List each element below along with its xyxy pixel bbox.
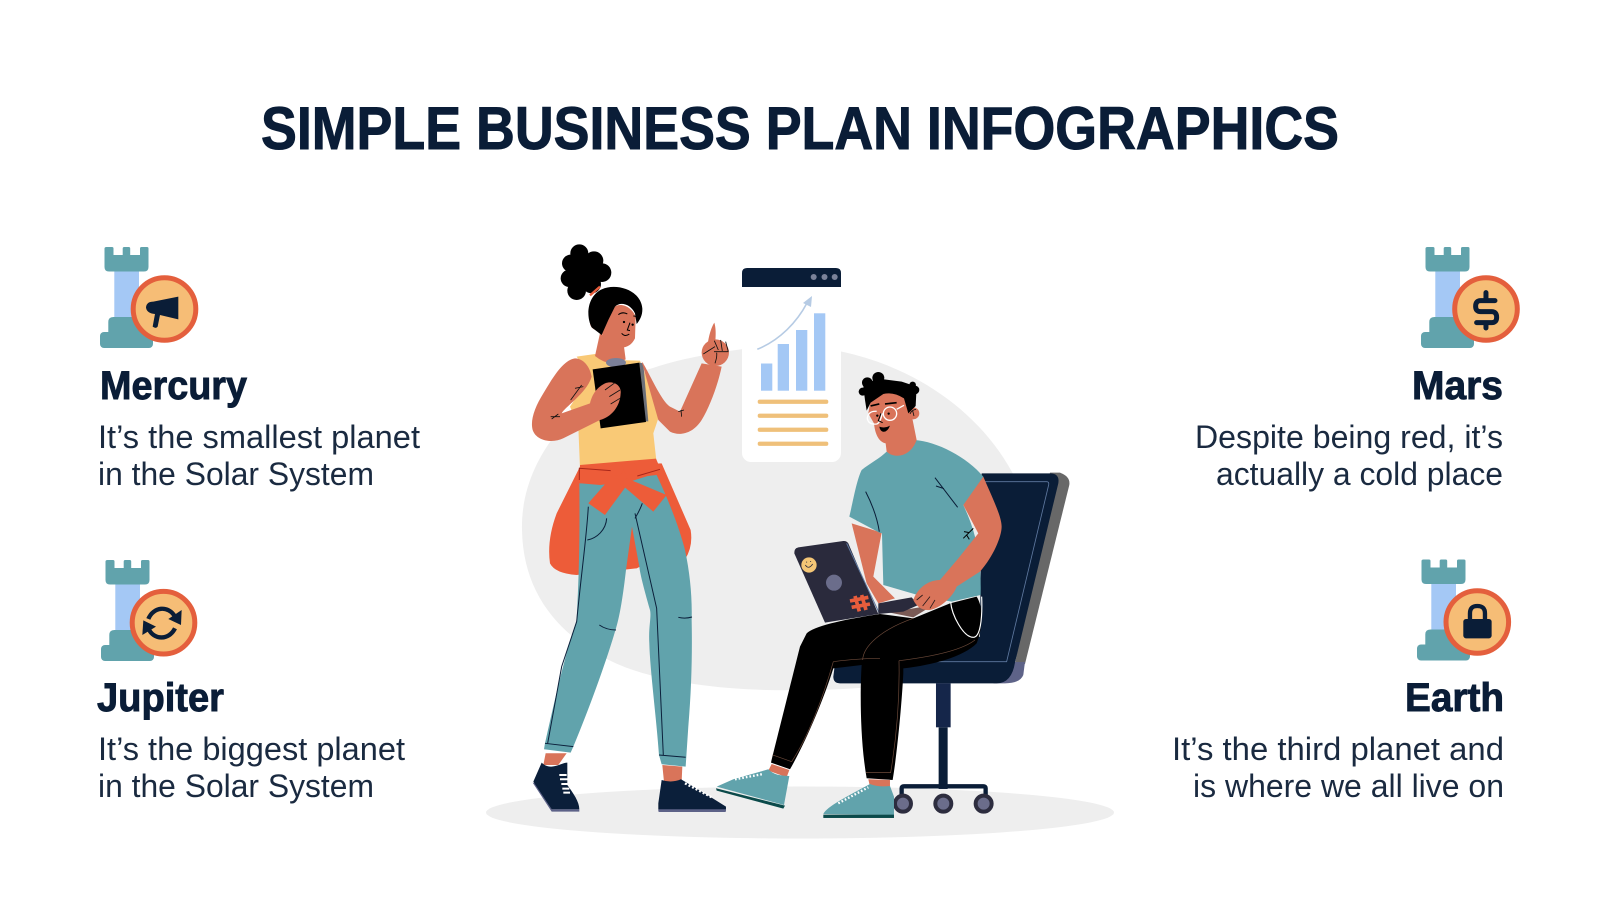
panel: Mars [1195,247,1517,492]
heading: Mars: Mars [1412,364,1503,408]
text block: Earth description: It’s the third planet and [1172,731,1504,767]
man: laptop [794,541,933,623]
woman: pants [544,475,692,767]
text block: Jupiter description: in the Solar System [98,768,374,804]
heading: Jupiter: Jupiter [97,676,224,720]
woman: orange shirt tied at waist (hanging back) [549,463,691,575]
heading: Mercury: Mercury [100,364,248,408]
woman: hair bun [561,244,611,300]
man: head [859,372,919,456]
text block: Earth description: is where we all live on [1193,768,1504,804]
panel: Mercury [98,247,420,492]
man: pants [771,597,982,780]
illustration: background blob [522,346,1029,690]
man: near arm [913,477,1002,610]
icon: tower with refresh arrows [101,560,195,661]
woman: clipboard [593,363,648,428]
woman: torso and head [570,287,660,468]
bar chart [761,313,825,391]
title: SIMPLE BUSINESS PLAN INFOGRAPHICS [261,95,1339,162]
woman: arms and hands [532,323,729,441]
chart card [742,268,841,462]
text block: Mercury description [98,419,420,492]
text block: Mercury description: It’s the smallest planet [98,419,420,455]
text block: Mercury description: in the Solar System [98,456,374,492]
heading: Earth: Earth [1405,676,1504,720]
text block: Mars description: actually a cold place [1216,456,1503,492]
woman: waist tie [579,459,667,515]
text block: Jupiter description [98,731,405,804]
man: t-shirt [849,440,983,602]
panel: Jupiter [97,560,405,804]
text block: Mars description [1195,419,1503,492]
chair [833,473,1069,812]
man: far arm [852,523,895,603]
man: shoes [716,764,894,818]
woman [532,244,729,812]
icon: tower with dollar sign [1421,247,1517,348]
woman: shoes [533,753,726,812]
text block: Earth description [1172,731,1504,804]
man [716,372,1002,818]
text block: Mars description: Despite being red, it’s [1195,419,1503,455]
text block: Jupiter description: It’s the biggest planet [98,731,405,767]
icon: tower with padlock [1417,560,1509,660]
arrow: growth trend [757,296,812,349]
panel: Earth [1172,560,1509,804]
illustration: ground shadow [486,786,1114,838]
text lines [758,400,828,446]
icon: tower with megaphone [100,247,196,348]
